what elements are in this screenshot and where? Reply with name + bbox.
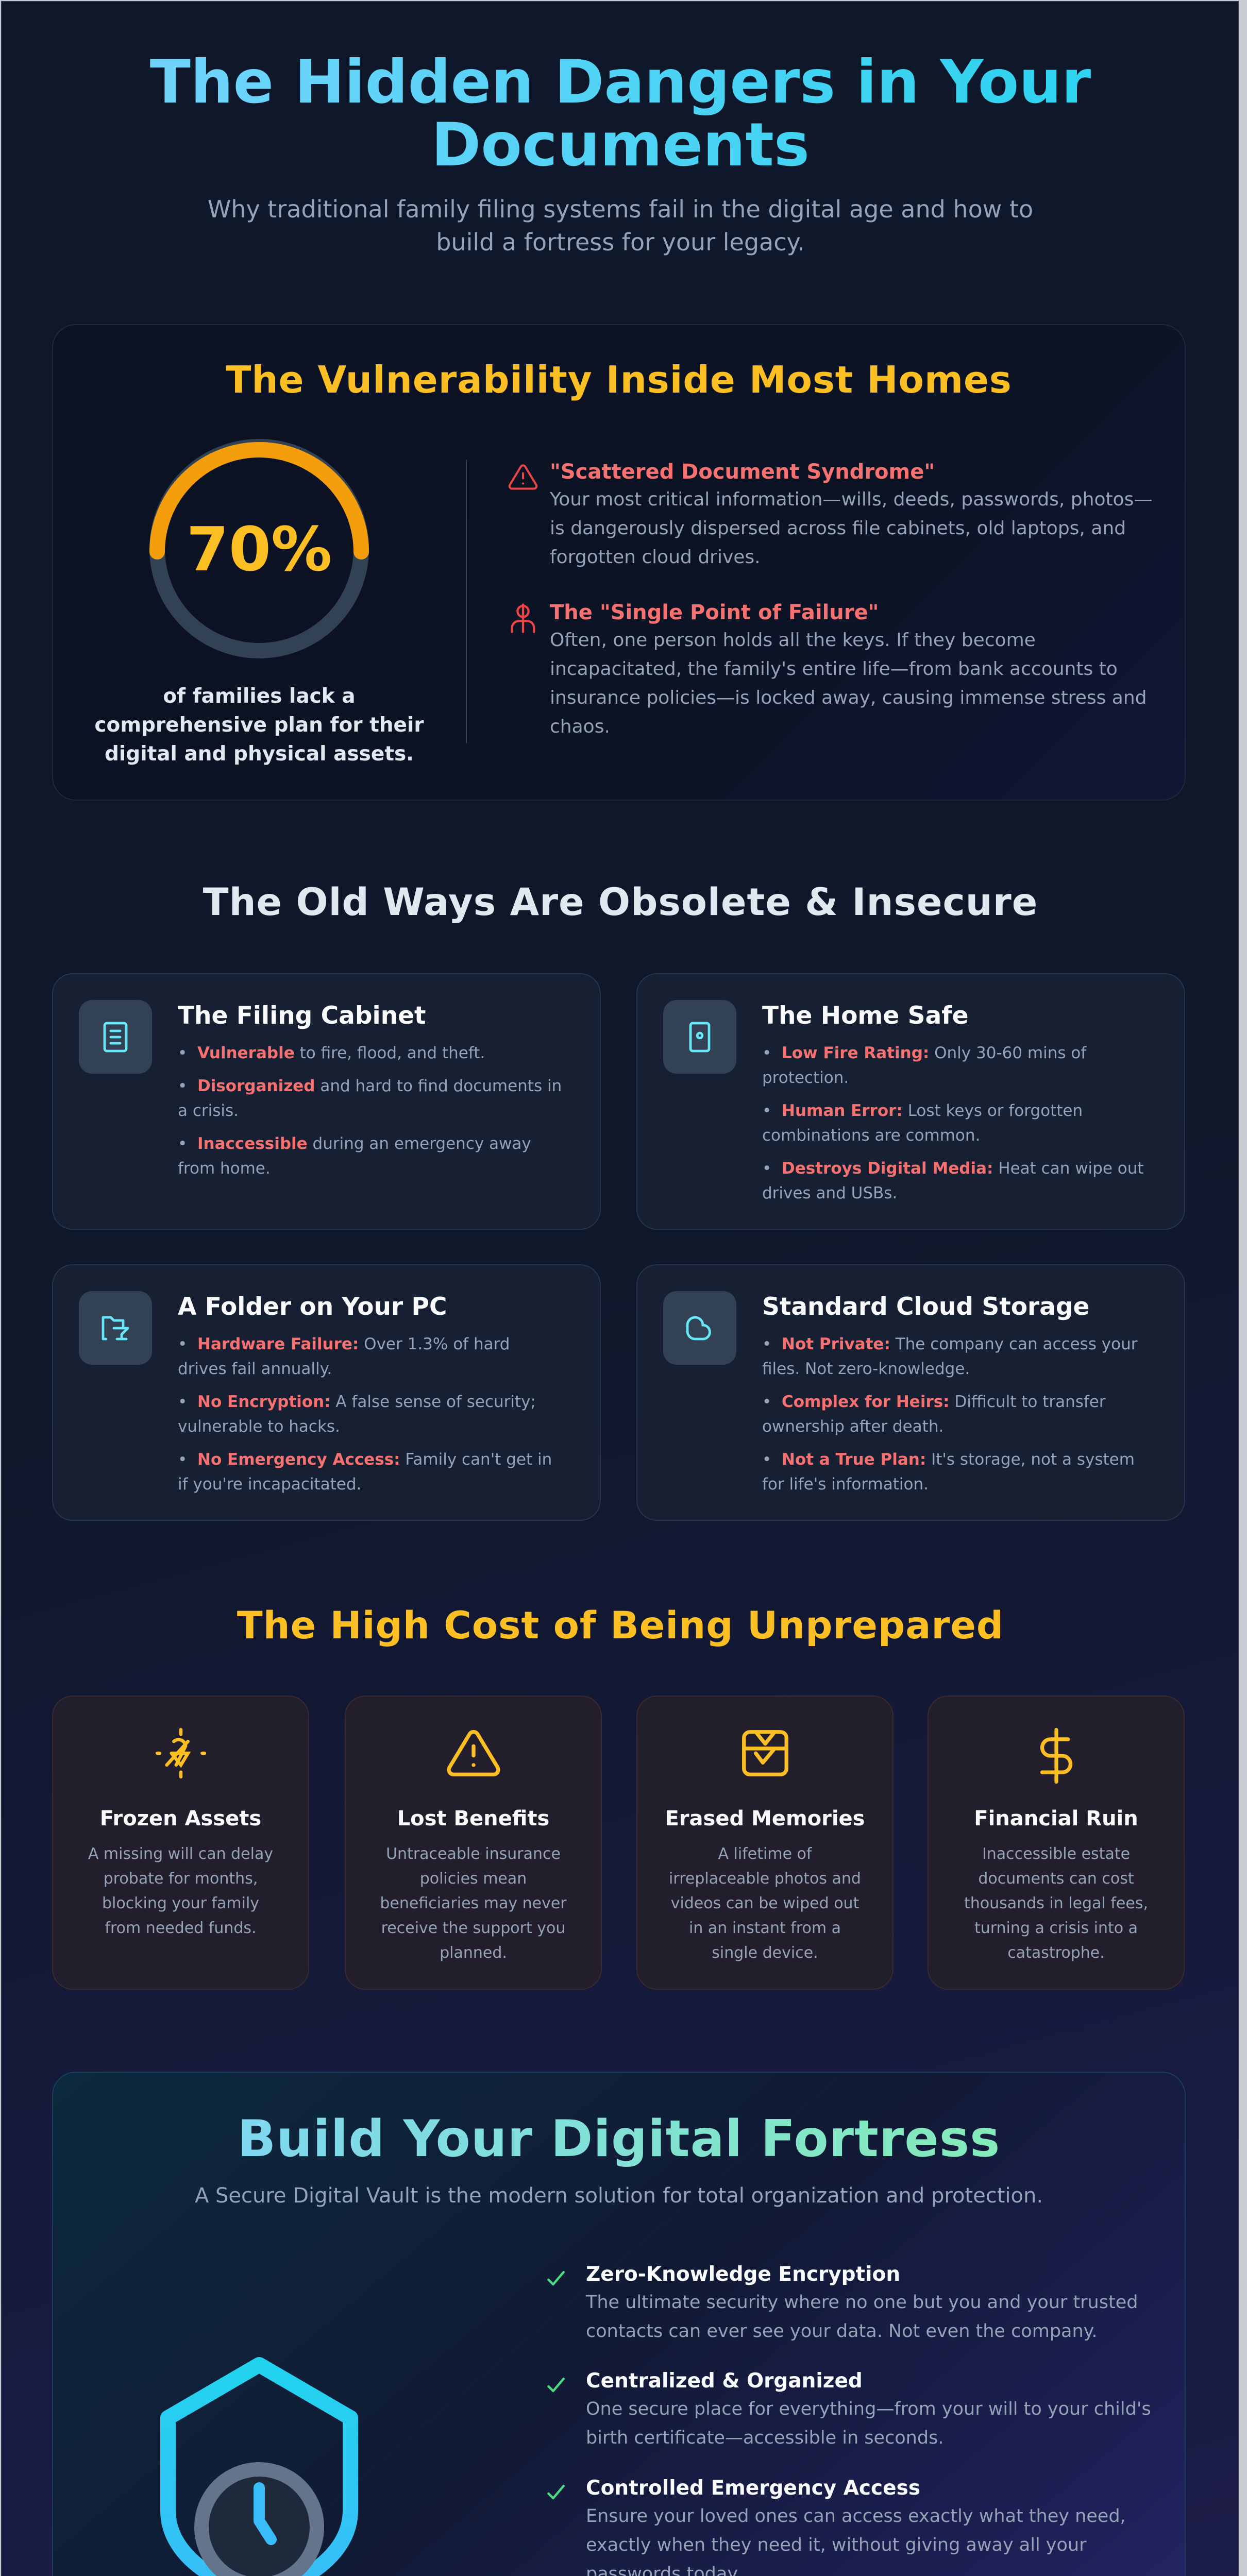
card: folder on pc: A Folder on Your PC [178,1293,447,1321]
card: cloud storage: • Not a True Plan: It's storage, not a system for life's information. [762,1450,1135,1494]
cost card: erased memories: in an instant from a [689,1919,841,1937]
cost card: frozen assets: blocking your family [102,1894,259,1912]
card: folder on pc [52,1264,601,1521]
item: emergency access: Controlled Emergency Access [586,2477,920,2500]
card: home safe: • Low Fire Rating: Only 30-60 mins of protection. [762,1044,1086,1087]
cost card: erased memories: A lifetime of [718,1845,812,1863]
cost card: lost benefits: beneficiaries may never [380,1894,567,1912]
card: filing cabinet: • Vulnerable to fire, flood, and theft. [178,1044,485,1062]
cost card: erased memories: single device. [712,1944,818,1962]
card: home safe: • Human Error: Lost keys or forgotten combinations are common. [762,1101,1083,1145]
subtitle: Why traditional family filing systems fail in the digital age and how to build a fortress for your legacy. [208,195,1033,256]
icon: check [547,2271,565,2285]
card: folder on pc: • No Encryption: A false sense of security; vulnerable to hacks. [178,1393,536,1436]
title: Documents [431,110,810,180]
card: filing cabinet: The Filing Cabinet [178,1002,426,1030]
cost card: lost benefits: Lost Benefits [397,1807,549,1831]
item: centralized: One secure place for everything—from your will to your child's birth certificate—accessible in seconds. [586,2399,1151,2448]
cost card: frozen assets [52,1696,309,1990]
icon: dollar [1040,1728,1073,1784]
cost card: financial ruin [928,1696,1185,1990]
heading: high cost: The High Cost of Being Unprepared [237,1604,1004,1648]
cost card: frozen assets: Frozen Assets [100,1807,261,1831]
stat caption: of families lack a comprehensive plan for their digital and physical assets. [94,685,424,766]
heading: old ways: The Old Ways Are Obsolete & Insecure [203,880,1038,924]
donut chart 70% [149,439,369,658]
cost card: financial ruin: thousands in legal fees, [964,1894,1148,1912]
icon: person [511,603,535,633]
donut chart 70%: 70% [187,514,332,585]
cost card: financial ruin: Financial Ruin [974,1807,1138,1831]
item: emergency access [547,2477,1126,2576]
cost card: lost benefits: planned. [440,1944,507,1962]
cost card: erased memories: irreplaceable photos and [669,1870,861,1888]
cost card: lost benefits [345,1696,602,1990]
card: folder on pc: • Hardware Failure: Over 1.3% of hard drives fail annually. [178,1335,510,1378]
card: filing cabinet: • Disorganized and hard to find documents in a crisis. [178,1077,562,1120]
cost card: lost benefits: Untraceable insurance [386,1845,561,1863]
item: zero-knowledge encryption [547,2263,1138,2342]
cost card: frozen assets: probate for months, [104,1870,258,1888]
cost card: lost benefits: policies mean [420,1870,527,1888]
icon: warning triangle [447,1730,500,1776]
icon: folder [79,1291,152,1365]
icon: check [547,2485,565,2500]
card: cloud storage: • Complex for Heirs: Difficult to transfer ownership after death. [762,1393,1106,1436]
cost card: erased memories [636,1696,894,1990]
card: home safe [636,973,1185,1230]
card: filing cabinet [52,973,601,1230]
icon: shield with clock [160,2357,358,2576]
title: The Hidden Dangers in Your [150,47,1091,117]
item: centralized [547,2369,1151,2448]
cost card: lost benefits: receive the support you [381,1919,565,1937]
card: home safe: The Home Safe [762,1002,969,1030]
heading: fortress: Build Your Digital Fortress [238,2110,1000,2168]
subtitle: fortress: A Secure Digital Vault is the modern solution for total organization and protection. [195,2184,1043,2208]
icon: safe [663,1000,736,1074]
cost card: financial ruin: turning a crisis into a [974,1919,1138,1937]
card: cloud storage: • Not Private: The company can access your files. Not zero-knowledge. [762,1335,1138,1378]
cost card: financial ruin: catastrophe. [1007,1944,1105,1962]
heading: fortress [53,2111,1185,2167]
cost card: erased memories: Erased Memories [665,1807,865,1831]
item: zero-knowledge encryption: The ultimate security where no one but you and your trusted contacts can ever see your data. Not even the company. [586,2292,1138,2342]
cost card: frozen assets: from needed funds. [105,1919,257,1937]
item: scattered document syndrome: "Scattered Document Syndrome" [550,460,935,484]
card: cloud storage [636,1264,1185,1521]
title [2,51,1239,177]
item: centralized: Centralized & Organized [586,2369,863,2393]
icon: photo [742,1730,788,1776]
panel: digital fortress [52,2072,1186,2576]
icon: cloud [663,1291,736,1365]
item: scattered document syndrome [508,460,1152,568]
cost card: erased memories: videos can be wiped out [671,1894,859,1912]
card: home safe: • Destroys Digital Media: Heat can wipe out drives and USBs. [762,1159,1144,1202]
card: folder on pc: • No Emergency Access: Family can't get in if you're incapacitated. [178,1450,552,1494]
panel: vulnerability [52,324,1186,801]
icon: warning [508,464,538,489]
card: cloud storage: Standard Cloud Storage [762,1293,1089,1321]
item: single point of failure: The "Single Point of Failure" [550,601,879,624]
card: filing cabinet: • Inaccessible during an emergency away from home. [178,1134,531,1178]
cost card: frozen assets: A missing will can delay [88,1845,273,1863]
item: zero-knowledge encryption: Zero-Knowledge Encryption [586,2263,900,2286]
icon: frozen [156,1728,206,1778]
icon: document [79,1000,152,1074]
item: scattered document syndrome: Your most critical information—wills, deeds, passwords, photos—is dangerously dispersed across file cabinets, old laptops, and forgotten cloud drives. [550,489,1152,568]
item: single point of failure: Often, one person holds all the keys. If they become incapacitated, the family's entire life—from bank accounts to insurance policies—is locked away, causing immense stress and chaos. [550,630,1147,737]
cost card: financial ruin: documents can cost [978,1870,1134,1888]
icon: check [547,2378,565,2393]
heading: vulnerability: The Vulnerability Inside Most Homes [226,358,1012,401]
cost card: financial ruin: Inaccessible estate [982,1845,1130,1863]
